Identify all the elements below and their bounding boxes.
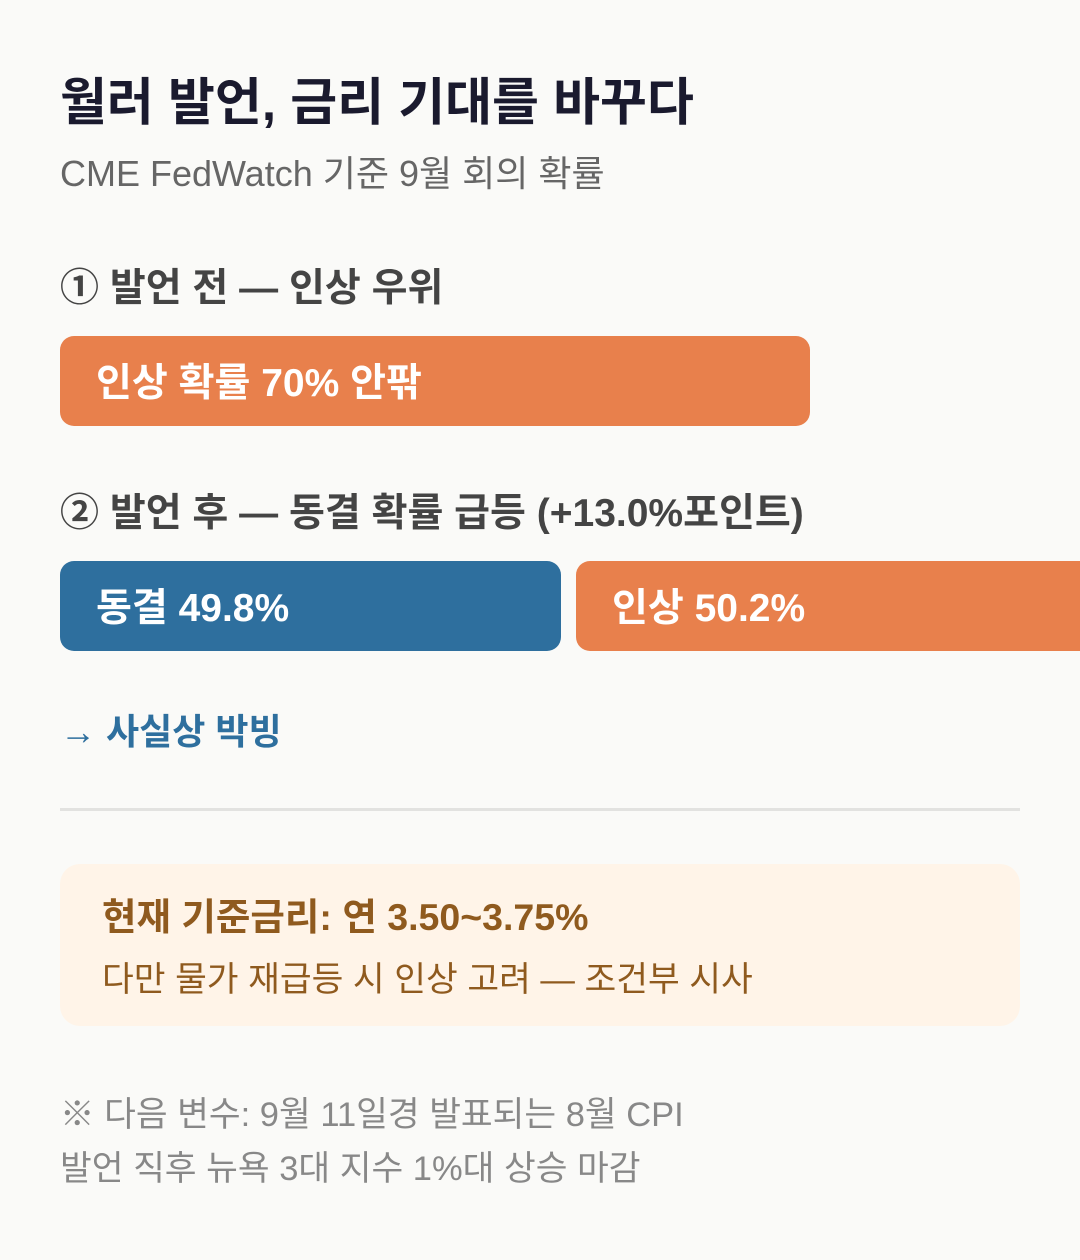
title: 월러 발언, 금리 기대를 바꾸다	[60, 74, 694, 131]
conclusion: effectively a coin flip: → 사실상 박빙	[60, 711, 282, 752]
footnote: 발언 직후 뉴욕 3대 지수 1%대 상승 마감	[60, 1150, 641, 1188]
footnote: ※ 다음 변수: 9월 11일경 발표되는 8월 CPI	[60, 1096, 684, 1134]
heading: before remarks: ① 발언 전 — 인상 우위	[60, 267, 443, 310]
bar: hold 49.8%: 동결 49.8%	[96, 587, 289, 630]
bar: hike 50.2%: 인상 50.2%	[612, 587, 805, 630]
footnote	[60, 1096, 684, 1188]
subtitle: CME FedWatch 기준 9월 회의 확률	[60, 153, 605, 194]
rate note: 다만 물가 재급등 시 인상 고려 — 조건부 시사	[102, 961, 753, 999]
bar: hike 50.2%	[576, 561, 1080, 651]
bar: hold 49.8%	[60, 561, 561, 651]
bar: hike 70%	[60, 336, 810, 426]
heading: after remarks: ② 발언 후 — 동결 확률 급등 (+13.0%포인트)	[60, 492, 804, 535]
bar: hike 70%: 인상 확률 70% 안팎	[96, 362, 422, 405]
rate heading: 현재 기준금리: 연 3.50~3.75%	[102, 896, 588, 938]
panel: current base rate	[60, 864, 1020, 1026]
